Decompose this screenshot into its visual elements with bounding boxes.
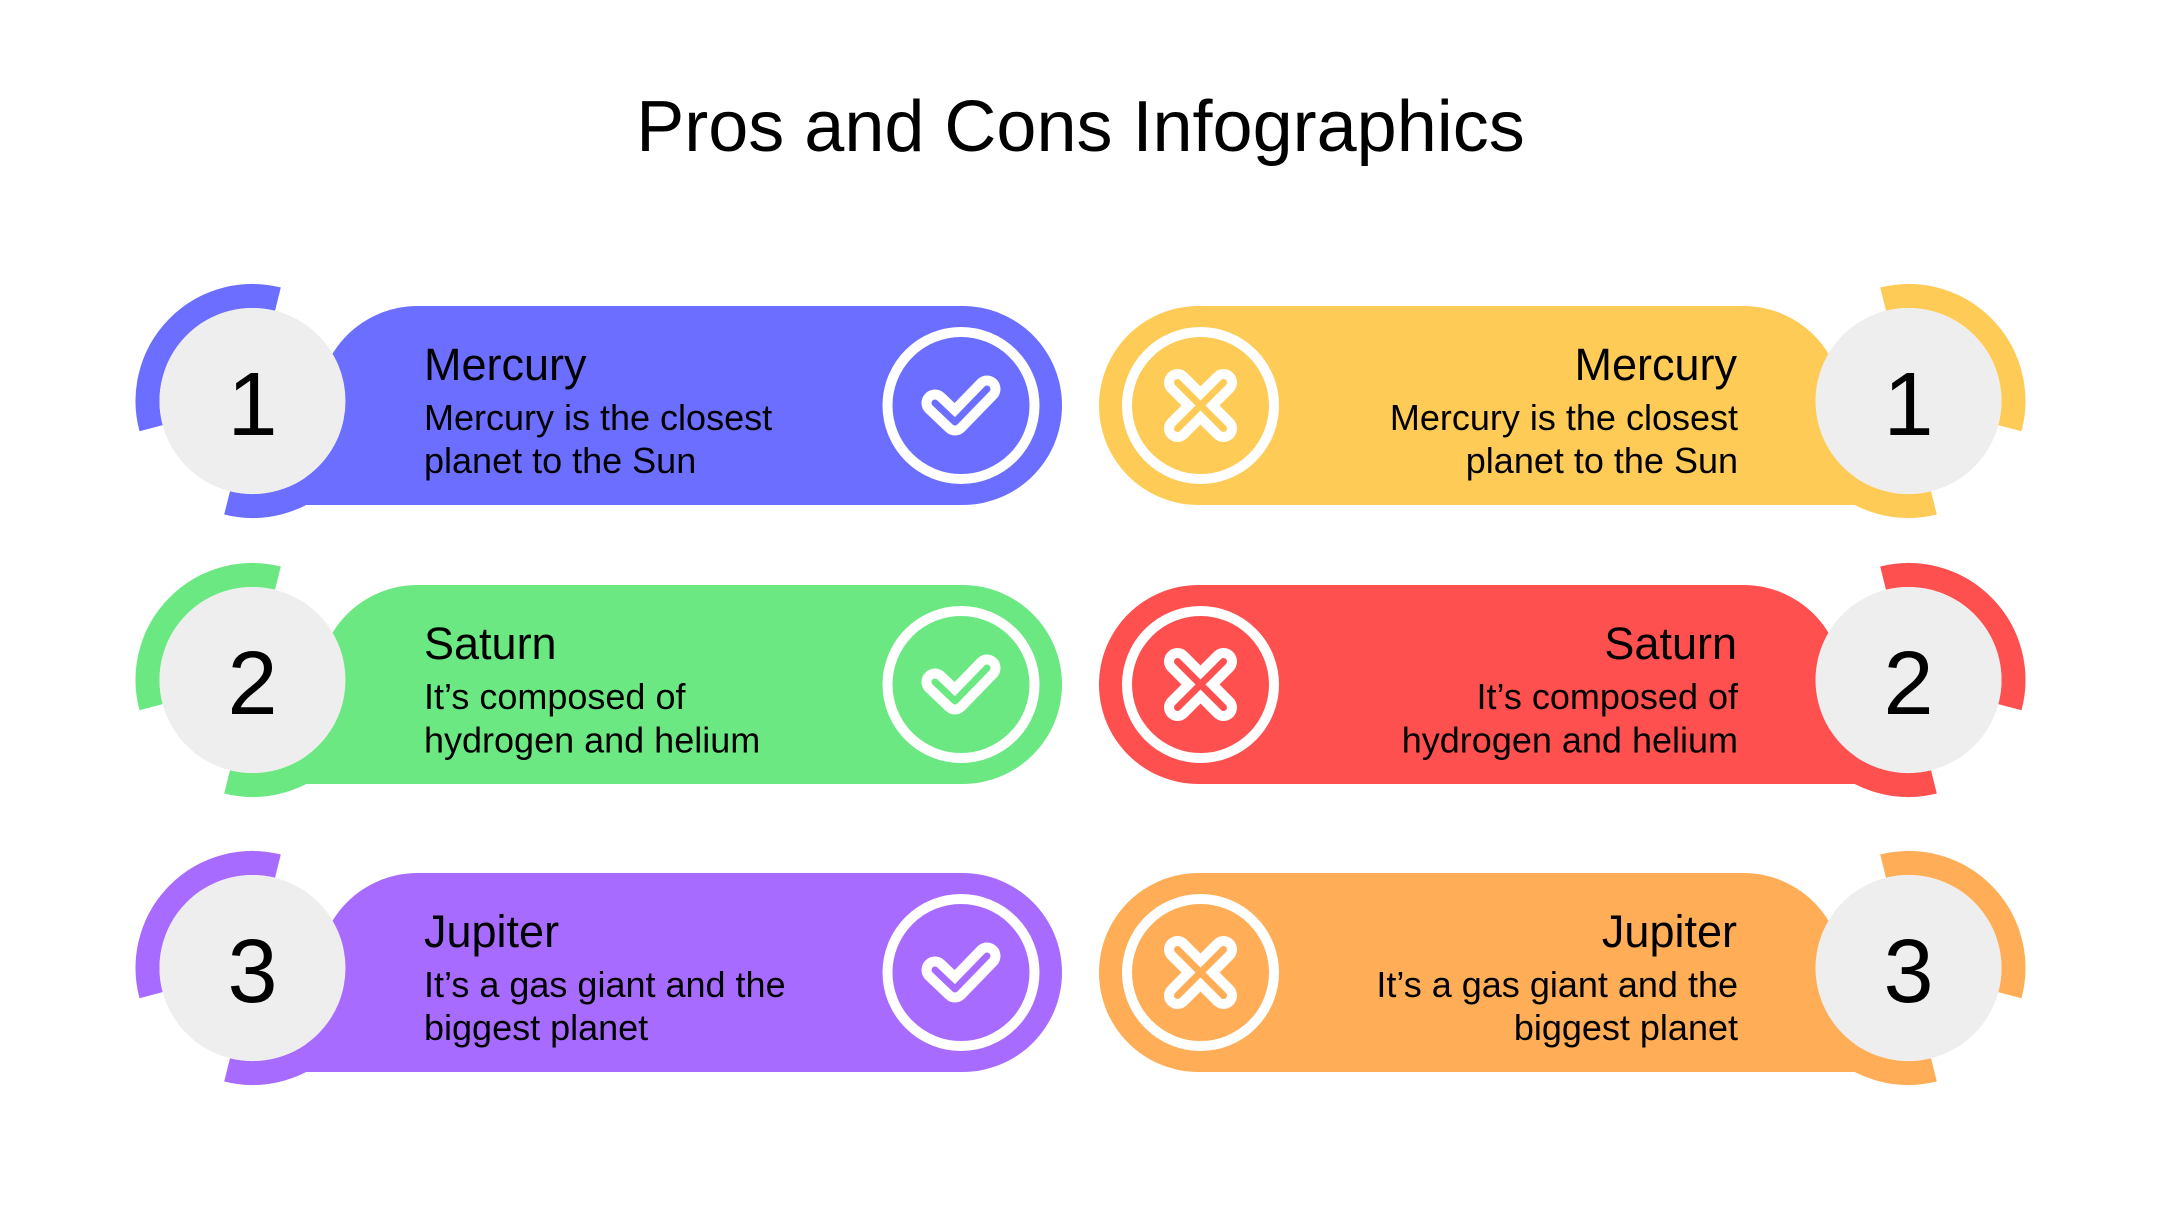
- icon: check: [888, 332, 1034, 479]
- text: Mercury: planet to the Sun: [424, 440, 696, 481]
- text: Saturn: [1402, 618, 1739, 760]
- number badge 3: 3: [1883, 922, 1934, 1022]
- panel: pro 3 Jupiter: [148, 863, 1062, 1073]
- panel: con 1 Mercury: [1099, 296, 2013, 506]
- icon: check: [888, 899, 1034, 1046]
- text: Mercury: Mercury is the closest: [1390, 397, 1738, 438]
- number badge 3: [1816, 863, 2013, 1073]
- number badge 1: 1: [227, 355, 278, 455]
- icon: cross: [1127, 332, 1274, 479]
- number badge 3: [148, 863, 346, 1073]
- text: Saturn: It’s composed of: [424, 676, 686, 717]
- panel: pro 2 Saturn: [148, 575, 1062, 785]
- text: Jupiter: [1376, 906, 1738, 1048]
- number badge 2: [148, 575, 346, 785]
- text: Jupiter: biggest planet: [424, 1007, 648, 1048]
- pill background: [1099, 306, 1855, 505]
- text: Mercury: Mercury is the closest: [424, 397, 772, 438]
- text: Mercury: Mercury: [1574, 339, 1737, 390]
- text: Jupiter: Jupiter: [1602, 906, 1737, 957]
- text: Jupiter: biggest planet: [1514, 1007, 1738, 1048]
- title: Pros and Cons Infographics: [636, 87, 1525, 167]
- text: Saturn: [424, 618, 760, 760]
- number badge 2: 2: [227, 634, 278, 734]
- text: Jupiter: Jupiter: [424, 906, 559, 957]
- pill background: [1099, 873, 1855, 1072]
- text: Saturn: hydrogen and helium: [424, 720, 760, 760]
- panel: pro 1 Mercury: [148, 296, 1062, 506]
- icon: cross: [1127, 899, 1274, 1046]
- number badge 1: 1: [1883, 355, 1934, 455]
- text: Mercury: planet to the Sun: [1466, 440, 1738, 481]
- number badge 3: 3: [227, 922, 278, 1022]
- icon: check: [888, 611, 1034, 758]
- panel: con 3 Jupiter: [1099, 863, 2013, 1073]
- number badge 1: [1816, 296, 2013, 506]
- text: Jupiter: It’s a gas giant and the: [424, 964, 786, 1005]
- pill background: [306, 873, 1062, 1072]
- text: Saturn: hydrogen and helium: [1402, 720, 1738, 760]
- text: Jupiter: It’s a gas giant and the: [1376, 964, 1738, 1005]
- text: Mercury: Mercury: [424, 339, 587, 390]
- text: Mercury: [1390, 339, 1738, 481]
- number badge 2: 2: [1883, 634, 1934, 734]
- pill background: [306, 306, 1062, 505]
- text: Saturn: It’s composed of: [1477, 676, 1739, 717]
- pill background: [1099, 585, 1855, 784]
- panel: con 2 Saturn: [1099, 575, 2013, 785]
- text: Jupiter: [424, 906, 786, 1048]
- pill background: [306, 585, 1062, 784]
- text: Saturn: Saturn: [1604, 618, 1737, 669]
- number badge 2: [1816, 575, 2013, 785]
- text: Mercury: [424, 339, 772, 481]
- text: Saturn: Saturn: [424, 618, 557, 669]
- number badge 1: [148, 296, 346, 506]
- icon: cross: [1127, 611, 1274, 758]
